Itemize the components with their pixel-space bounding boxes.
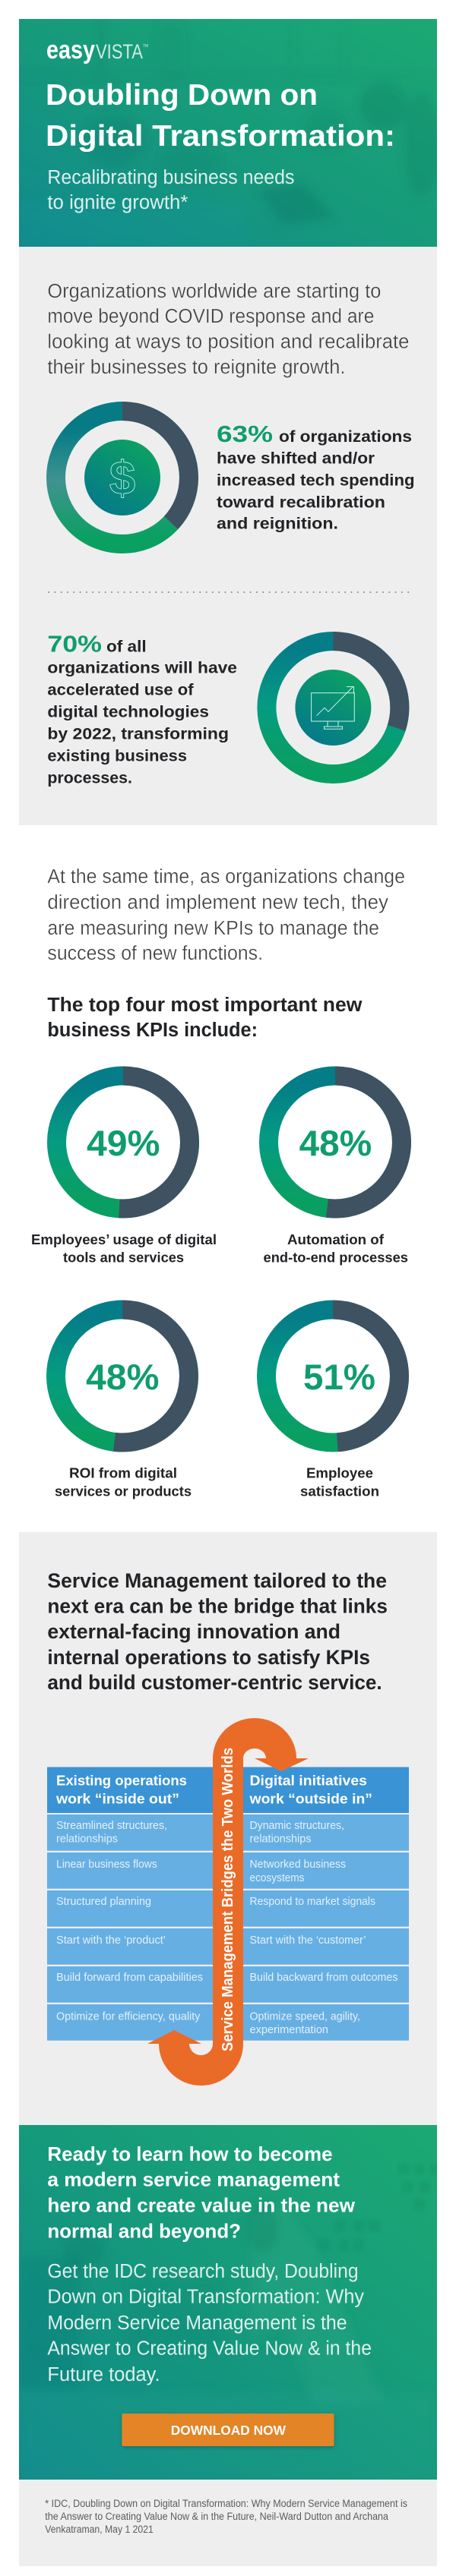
button: download now: DOWNLOAD NOW xyxy=(171,2423,286,2438)
footnote text: Venkatraman, May 1 2021 xyxy=(45,2524,154,2535)
subtitle: Recalibrating business needs xyxy=(47,167,294,188)
KPI label: ROI: ROI from digital xyxy=(69,1466,177,1481)
right column: digital initiatives xyxy=(249,1773,398,2036)
KPI intro text: At the same time, as organizations change xyxy=(47,866,405,888)
CTA heading: Ready to learn how to become xyxy=(47,2142,333,2165)
arrow: orange bridge band: Service Management Bridges the Two Worlds xyxy=(219,1748,236,2051)
logo: easyVISTA: TM xyxy=(143,44,148,49)
KPI donut: 48% ROI xyxy=(56,1310,188,1442)
title xyxy=(46,79,395,153)
KPI label: automation xyxy=(263,1232,408,1266)
bridge heading: Service Management tailored to the xyxy=(47,1569,387,1592)
left column: existing operations: relationships xyxy=(56,1833,118,1846)
button: download now xyxy=(122,2414,334,2446)
KPI label: automation: end-to-end processes xyxy=(263,1250,408,1266)
bridge heading xyxy=(47,1569,388,1694)
stat: 63% of organizations: 63% xyxy=(217,421,273,447)
subtitle xyxy=(47,167,294,213)
stat: 70% of all organizations: accelerated use of xyxy=(47,681,194,699)
CTA body text xyxy=(47,2261,372,2385)
KPI label: automation: Automation of xyxy=(287,1232,385,1247)
CTA heading xyxy=(47,2142,356,2242)
CTA heading: hero and create value in the new xyxy=(47,2194,356,2217)
KPI label: ROI xyxy=(55,1466,192,1499)
stat: 63% of organizations: and reignition. xyxy=(217,515,338,533)
panel: service management bridge xyxy=(19,1532,437,2126)
donut: 70% with monitor icon xyxy=(267,641,400,774)
bridge heading: external-facing innovation and xyxy=(47,1620,340,1643)
KPI donut: 51%: 51% xyxy=(303,1357,375,1397)
logo: easyVISTA xyxy=(46,36,148,65)
bridge heading: internal operations to satisfy KPIs xyxy=(47,1646,370,1669)
left column: existing operations: Existing operations xyxy=(56,1773,187,1789)
right column: digital initiatives: Start with the ‘customer’ xyxy=(249,1934,366,1947)
KPI label: employees usage: tools and services xyxy=(63,1250,184,1266)
bridge heading: next era can be the bridge that links xyxy=(47,1594,388,1617)
KPI intro text: success of new functions. xyxy=(47,943,263,964)
right column: digital initiatives: ecosystems xyxy=(249,1871,304,1884)
CTA background xyxy=(19,2125,437,2480)
comparison table xyxy=(47,1767,409,2041)
KPI intro text: direction and implement new tech, they xyxy=(47,892,388,913)
footnote text: the Answer to Creating Value Now & in the Future, Neil-Ward Dutton and Archana xyxy=(45,2511,388,2522)
stat: 70% of all organizations: organizations will have xyxy=(47,659,237,677)
KPI intro text xyxy=(47,866,405,964)
KPI heading: The top four most important new xyxy=(47,995,363,1016)
panel: footnote xyxy=(19,2480,437,2566)
stat: 63% of organizations: of organizations xyxy=(279,427,412,446)
KPI donut: 48% automation xyxy=(269,1076,401,1209)
logo: easyVISTA: VISTA xyxy=(96,40,143,63)
panel background xyxy=(19,1532,437,2126)
hero photo overlay xyxy=(19,19,440,247)
right column: digital initiatives: Dynamic structures, xyxy=(249,1819,344,1832)
right column: digital initiatives: experimentation xyxy=(249,2023,328,2036)
subtitle: to ignite growth* xyxy=(47,192,188,213)
stat: 70% of all organizations: by 2022, transforming xyxy=(47,724,229,743)
right column: digital initiatives: Respond to market signals xyxy=(249,1895,375,1908)
stat: 70% of all organizations: of all xyxy=(106,637,147,655)
left column: existing operations: Optimize for efficiency, quality xyxy=(56,2010,201,2023)
right column: digital initiatives: Digital initiatives xyxy=(249,1773,367,1789)
KPI donut: 48% ROI: 48% xyxy=(86,1357,159,1397)
KPI label: employees usage: Employees’ usage of digital xyxy=(31,1232,217,1247)
CTA heading: a modern service management xyxy=(47,2168,340,2191)
intro text: their businesses to reignite growth. xyxy=(47,357,345,378)
KPI label: ROI: services or products xyxy=(55,1484,192,1499)
footnote text: * IDC, Doubling Down on Digital Transformation: Why Modern Service Management is xyxy=(45,2498,407,2509)
icon: monitor with rising chart xyxy=(295,670,371,746)
stat: 70% of all organizations: 70% xyxy=(47,630,102,657)
donut: 63% with dollar icon xyxy=(56,411,188,544)
stat: 63% of organizations: have shifted and/or xyxy=(217,449,375,468)
KPI intro text: are measuring new KPIs to manage the xyxy=(47,918,379,939)
left column: existing operations: Start with the ‘product’ xyxy=(56,1934,166,1947)
stat: 70% of all organizations: existing business xyxy=(47,747,187,765)
CTA photo overlay xyxy=(24,2167,436,2403)
intro text: Organizations worldwide are starting to xyxy=(47,281,381,302)
KPI donut: 49% xyxy=(56,1076,190,1209)
stat: 63% of organizations: increased tech spending xyxy=(217,471,415,489)
right column: digital initiatives: relationships xyxy=(249,1833,312,1846)
stat: 63% of organizations: toward recalibration xyxy=(217,493,385,511)
stat: 70% of all organizations: digital technologies xyxy=(47,703,209,721)
right column: digital initiatives: Optimize speed, agility, xyxy=(249,2010,360,2023)
footnote text xyxy=(45,2498,407,2535)
CTA body text: Future today. xyxy=(47,2364,160,2385)
stat: 70% of all organizations xyxy=(47,630,237,787)
arrow: orange bridge band xyxy=(147,1718,309,2086)
logo: easyVISTA: easy xyxy=(46,36,95,65)
CTA heading: normal and beyond? xyxy=(47,2219,241,2242)
hero background xyxy=(19,19,437,247)
KPI label: employee satisfaction: Employee xyxy=(306,1466,373,1481)
left column: existing operations xyxy=(55,1773,203,2023)
stat: 70% of all organizations: processes. xyxy=(47,768,132,787)
right column: digital initiatives: Build backward from outcomes xyxy=(249,1971,398,1984)
CTA body text: Get the IDC research study, Doubling xyxy=(47,2261,359,2282)
KPI donut: 49%: 49% xyxy=(87,1123,160,1163)
title: Doubling Down on xyxy=(46,79,318,112)
right column: digital initiatives: Networked business xyxy=(249,1858,346,1871)
bridge heading: and build customer-centric service. xyxy=(47,1671,382,1694)
KPI heading: business KPIs include: xyxy=(47,1020,258,1041)
table backgrounds xyxy=(47,1767,409,2041)
left column: existing operations: Structured planning xyxy=(56,1895,151,1908)
left column: existing operations: Linear business flows xyxy=(56,1858,157,1871)
right column: digital initiatives: work “outside in” xyxy=(249,1791,372,1807)
CTA body text: Answer to Creating Value Now & in the xyxy=(47,2338,372,2360)
KPI donut: 48% automation: 48% xyxy=(299,1123,372,1163)
icon: dollar: $ xyxy=(109,452,135,505)
panel: organizations statistics xyxy=(19,247,437,825)
intro text xyxy=(47,281,409,378)
CTA body text: Modern Service Management is the xyxy=(47,2313,347,2334)
KPI donut: 51% xyxy=(266,1310,400,1442)
left column: existing operations: Build forward from capabilities xyxy=(56,1971,203,1984)
KPI label: employee satisfaction: satisfaction xyxy=(300,1484,379,1499)
left column: existing operations: work “inside out” xyxy=(55,1791,179,1807)
title: Digital Transformation: xyxy=(46,120,395,153)
section: new KPIs xyxy=(31,866,408,1499)
stat: 63% of organizations xyxy=(217,421,415,533)
hero banner xyxy=(19,19,440,247)
left column: existing operations: Streamlined structures, xyxy=(56,1819,167,1832)
panel background xyxy=(19,247,437,825)
KPI label: employees usage xyxy=(31,1232,217,1266)
CTA body text: Down on Digital Transformation: Why xyxy=(47,2287,364,2308)
KPI heading xyxy=(47,995,363,1041)
icon: dollar xyxy=(84,440,160,516)
intro text: looking at ways to position and recalibrate xyxy=(47,331,409,352)
panel: call to action xyxy=(19,2125,440,2480)
KPI label: employee satisfaction xyxy=(300,1466,379,1499)
intro text: move beyond COVID response and are xyxy=(47,306,374,327)
